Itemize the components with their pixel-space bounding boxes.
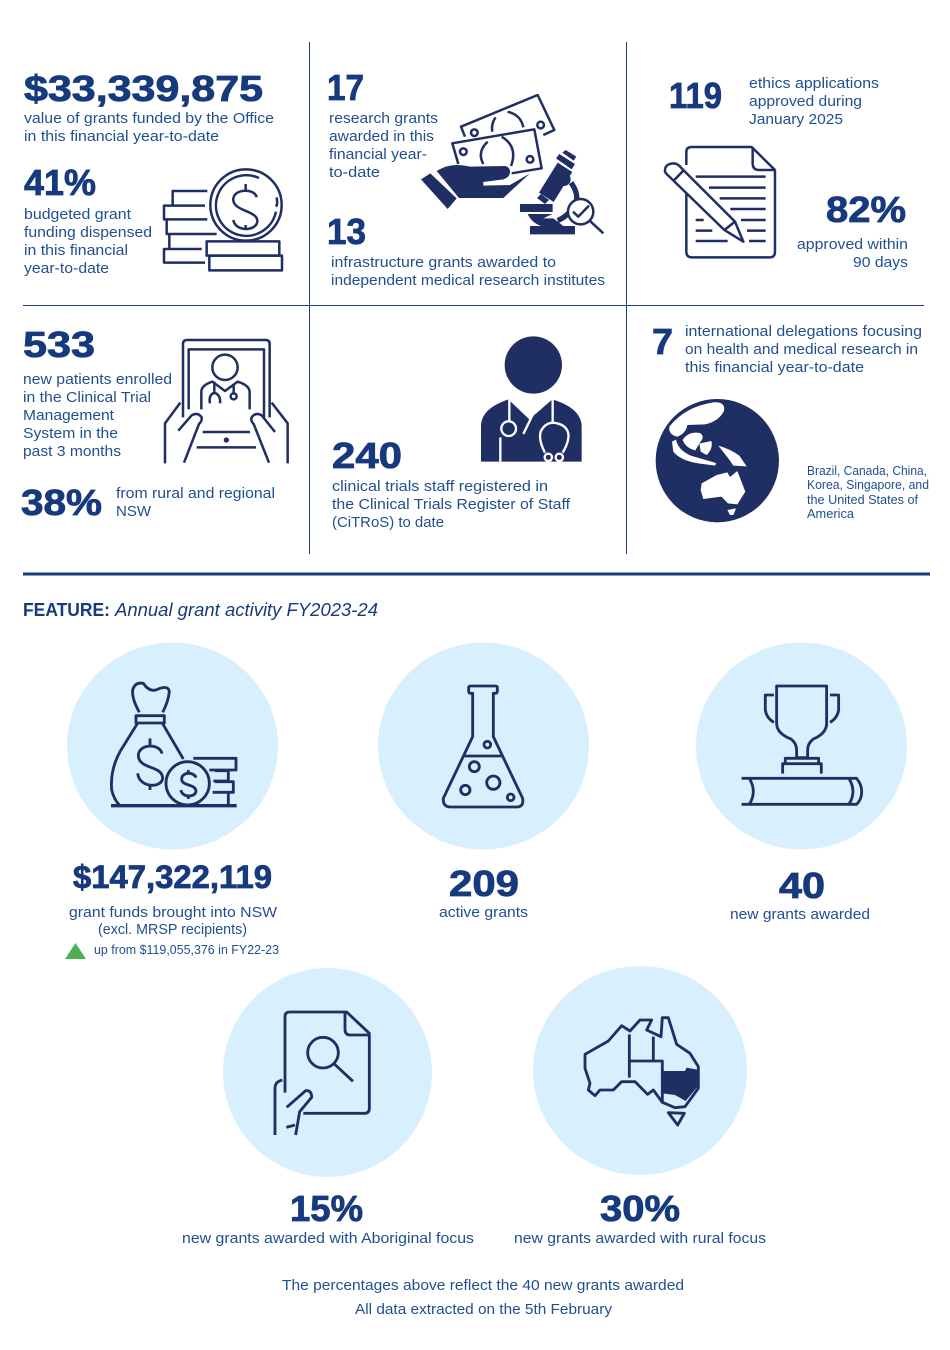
text: ethics applications description bbox=[749, 75, 879, 128]
panel: value of grants funded bbox=[24, 68, 282, 277]
text: grants value description: value of grants funded by the Office bbox=[24, 110, 274, 127]
stat: 17: 17 bbox=[327, 67, 364, 108]
stat: $147,322,119: $147,322,119 bbox=[73, 859, 272, 895]
text: delegation countries: Brazil, Canada, China, bbox=[807, 463, 927, 478]
text: Aboriginal focus: new grants awarded with Aboriginal focus bbox=[182, 1230, 474, 1247]
icon: globe bbox=[656, 399, 779, 522]
stat: 15%: 15% bbox=[290, 1188, 363, 1229]
text: clinical trials staff description: (CiTRoS) to date bbox=[332, 514, 444, 531]
text: ethics applications description: ethics applications bbox=[749, 75, 879, 92]
footnote: All data extracted on the 5th February bbox=[355, 1301, 613, 1318]
panel: clinical trial patients bbox=[21, 324, 288, 523]
stat: 119: 119 bbox=[669, 75, 722, 116]
text: clinical trials staff description bbox=[332, 478, 571, 531]
text: delegations description: on health and medical research in bbox=[685, 341, 918, 358]
footnote: The percentages above reflect the 40 new grants awarded bbox=[282, 1277, 684, 1294]
text: research grants description: to-date bbox=[329, 164, 380, 181]
icon: map of Australia bbox=[585, 1018, 699, 1125]
text: approved within 90 days: approved within bbox=[797, 236, 908, 253]
text: budgeted grant funding: funding dispensed bbox=[24, 224, 152, 241]
text: budgeted grant funding: budgeted grant bbox=[24, 206, 132, 223]
icon: document and pencil bbox=[665, 147, 775, 257]
stat: 82%: 82% bbox=[826, 189, 906, 230]
stat: 533: 533 bbox=[23, 324, 95, 365]
text: grant funds description bbox=[69, 904, 278, 938]
text: infrastructure grants description: independent medical research institutes bbox=[331, 272, 605, 289]
text: new grants awarded: new grants awarded bbox=[730, 906, 870, 923]
panel: international delegations bbox=[652, 321, 929, 522]
text: delegation countries bbox=[807, 463, 929, 521]
text: research grants description bbox=[329, 110, 438, 181]
circle background bbox=[67, 642, 278, 850]
text: ethics applications description: approved during bbox=[749, 93, 862, 110]
text: patients enrolled description: past 3 months bbox=[23, 443, 121, 460]
text: rural focus: new grants awarded with rural focus bbox=[514, 1230, 766, 1247]
heading: feature: FEATURE: bbox=[23, 600, 110, 620]
text: patients enrolled description: Management bbox=[23, 407, 115, 424]
text: grant funds description: grant funds brought into NSW bbox=[69, 904, 278, 921]
text: rural and regional NSW: NSW bbox=[116, 503, 152, 520]
stat: $33,339,875: $33,339,875 bbox=[24, 68, 263, 109]
text: research grants description: financial year- bbox=[329, 146, 427, 163]
text: delegation countries: America bbox=[807, 506, 855, 521]
stat: 41%: 41% bbox=[24, 162, 96, 203]
stat: 209: 209 bbox=[449, 863, 519, 904]
text: patients enrolled description: new patients enrolled bbox=[23, 371, 172, 388]
text: delegations description: international delegations focusing bbox=[685, 323, 922, 340]
text: rural and regional NSW: from rural and regional bbox=[116, 485, 275, 502]
text: patients enrolled description: in the Clinical Trial bbox=[23, 389, 151, 406]
stat: 40: 40 bbox=[779, 865, 825, 906]
icon: money bag and coins bbox=[111, 683, 237, 806]
circle background bbox=[223, 968, 432, 1177]
panel: active grants bbox=[378, 642, 589, 921]
text: budgeted grant funding: year-to-date bbox=[24, 260, 109, 277]
circle background bbox=[533, 966, 747, 1175]
icon: flask bbox=[443, 686, 523, 807]
stat: 13: 13 bbox=[327, 211, 366, 252]
text: patients enrolled description bbox=[23, 371, 172, 460]
text: approved within 90 days bbox=[797, 236, 908, 271]
panel: new grants bbox=[696, 642, 907, 923]
text: delegations description bbox=[685, 323, 922, 376]
text: infrastructure grants description: infrastructure grants awarded to bbox=[331, 254, 556, 271]
text: grant funds description: (excl. MRSP recipients) bbox=[98, 921, 247, 938]
icon: doctor with stethoscope bbox=[481, 336, 582, 462]
text: delegations description: this financial year-to-date bbox=[685, 359, 864, 376]
panel: rural focus bbox=[514, 966, 766, 1247]
text: delegation countries: Korea, Singapore, and bbox=[807, 477, 929, 492]
panel: grant funds bbox=[65, 642, 279, 959]
text: research grants description: research grants bbox=[329, 110, 438, 127]
text: rural and regional NSW bbox=[116, 485, 275, 520]
icon: trophy on book bbox=[742, 686, 862, 804]
circle background bbox=[378, 642, 589, 850]
text: year comparison: up from $119,055,376 in FY22-23 bbox=[94, 942, 279, 957]
icon: document, magnifier and hand bbox=[275, 1012, 369, 1135]
text: approved within 90 days: 90 days bbox=[853, 254, 908, 271]
text: patients enrolled description: System in the bbox=[23, 425, 118, 442]
icon: coins bbox=[164, 169, 282, 270]
footnote bbox=[282, 1277, 684, 1318]
text: ethics applications description: January 2025 bbox=[749, 111, 843, 128]
icon: hand with banknotes and microscope bbox=[421, 95, 603, 234]
text: grants value description: in this financial year-to-date bbox=[24, 128, 219, 145]
stat: 38%: 38% bbox=[21, 482, 102, 523]
text: clinical trials staff description: the Clinical Trials Register of Staff bbox=[332, 496, 571, 513]
panel: ethics applications bbox=[665, 75, 908, 271]
text: delegation countries: the United States of bbox=[807, 492, 918, 507]
panel: clinical trials staff bbox=[332, 336, 582, 531]
circle background bbox=[696, 642, 907, 850]
text: grants value description bbox=[24, 110, 274, 145]
text: infrastructure grants description bbox=[331, 254, 605, 289]
text: active grants: active grants bbox=[439, 904, 528, 921]
text: budgeted grant funding bbox=[24, 206, 152, 277]
stat: 7: 7 bbox=[652, 321, 673, 362]
text: research grants description: awarded in this bbox=[329, 128, 434, 145]
icon: green up triangle bbox=[65, 943, 86, 959]
icon: hands holding tablet with doctor bbox=[165, 340, 288, 463]
heading: feature: Annual grant activity FY2023-24 bbox=[114, 600, 378, 620]
panel: research grants bbox=[327, 67, 605, 289]
text: clinical trials staff description: clinical trials staff registered in bbox=[332, 478, 548, 495]
text: budgeted grant funding: in this financial bbox=[24, 242, 128, 259]
panel: Aboriginal focus bbox=[182, 968, 474, 1247]
stat: 240: 240 bbox=[332, 435, 402, 476]
stat: 30%: 30% bbox=[600, 1188, 680, 1229]
